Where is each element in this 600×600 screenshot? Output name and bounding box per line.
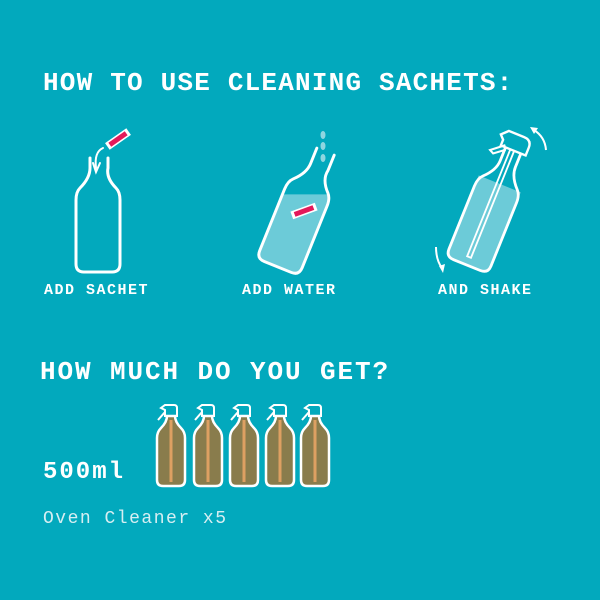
volume label: 500ml (43, 459, 125, 486)
product text: Oven Cleaner x5 (43, 509, 228, 529)
title: HOW TO USE CLEANING SACHETS: (43, 68, 513, 98)
text: AND SHAKE (438, 282, 533, 299)
icon: step 3 spray bottle shaking (446, 127, 540, 274)
heading: how much: HOW MUCH DO YOU GET? (40, 357, 390, 387)
illustration: steps (74, 127, 547, 275)
icon: step 1 empty bottle with sachet (76, 128, 131, 272)
step labels: ADD SACHET (44, 282, 149, 299)
text: ADD WATER (242, 282, 337, 299)
icon row: five bottles (156, 404, 330, 488)
icon: step 2 bottle with water (257, 146, 336, 275)
